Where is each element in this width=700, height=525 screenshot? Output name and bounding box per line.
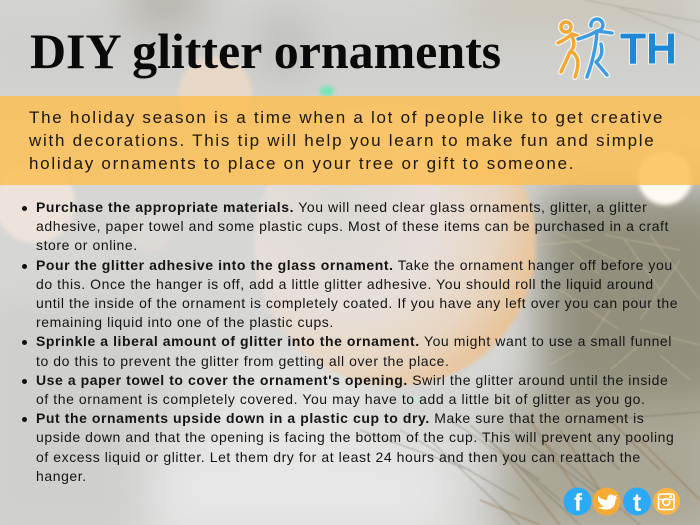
step 5	[0, 409, 700, 486]
step 4: of the ornament is completely covered. You may have to add a little bit of glitter as you go.	[36, 391, 645, 407]
instruction list	[22, 199, 678, 484]
logo: TH figures	[555, 16, 677, 80]
step 1: store or online.	[36, 237, 138, 253]
step 4	[0, 371, 700, 409]
step 5: Put the ornaments upside down in a plastic cup to dry. Make sure that the ornament is	[36, 410, 644, 426]
step 4: Use a paper towel to cover the ornament's opening. Swirl the glitter around until the inside	[36, 372, 668, 388]
step 3	[0, 332, 700, 371]
intro text: The holiday season is a time when a lot of people like to get creative	[29, 108, 664, 127]
tree needles	[540, 232, 700, 380]
step 2: remaining liquid into one of the plastic cups.	[36, 314, 334, 330]
step 2: until the inside of the ornament is completely coated. If you have any left over you can pour the	[36, 295, 678, 311]
orange figure	[558, 19, 612, 77]
step 5: upside down and that the opening is facing the bottom of the cup. This will prevent any pooling	[36, 429, 674, 445]
intro text: with decorations. This tip will help you learn to make fun and simple	[29, 131, 655, 150]
icon: twitter	[592, 488, 620, 516]
step 1	[0, 198, 700, 256]
intro text: holiday ornaments to place on your tree or gift to someone.	[29, 154, 575, 173]
intro text	[29, 108, 664, 173]
social icons	[564, 488, 680, 517]
step 1: adhesive, paper towel and some plastic cups. Most of these items can be purchased in a craft	[36, 218, 669, 234]
step 3: to do this to prevent the glitter from getting all over the place.	[36, 353, 450, 369]
ornament ball	[254, 104, 536, 386]
step 2: do this. Once the hanger is off, add a little glitter adhesive. You should roll the liquid around	[36, 276, 654, 292]
step 3: Sprinkle a liberal amount of glitter into the ornament. You might want to use a small funnel	[36, 333, 672, 349]
step 5: of excess liquid or glitter. Let them dry for at least 24 hours and then you can reattach the	[36, 449, 641, 465]
blue figure	[578, 19, 612, 77]
step 2	[0, 256, 700, 332]
step 2: Pour the glitter adhesive into the glass ornament. Take the ornament hanger off before you	[36, 257, 673, 273]
step 1: Purchase the appropriate materials. You will need clear glass ornaments, glitter, a glitter	[36, 199, 647, 215]
icon: tumblr: t	[633, 489, 642, 517]
title: DIY glitter ornaments	[30, 23, 501, 79]
intro band	[0, 96, 700, 185]
icon: facebook: f	[574, 490, 583, 516]
step 5: hanger.	[36, 468, 87, 484]
icon: instagram	[653, 488, 680, 515]
TH letters: TH	[620, 24, 677, 74]
